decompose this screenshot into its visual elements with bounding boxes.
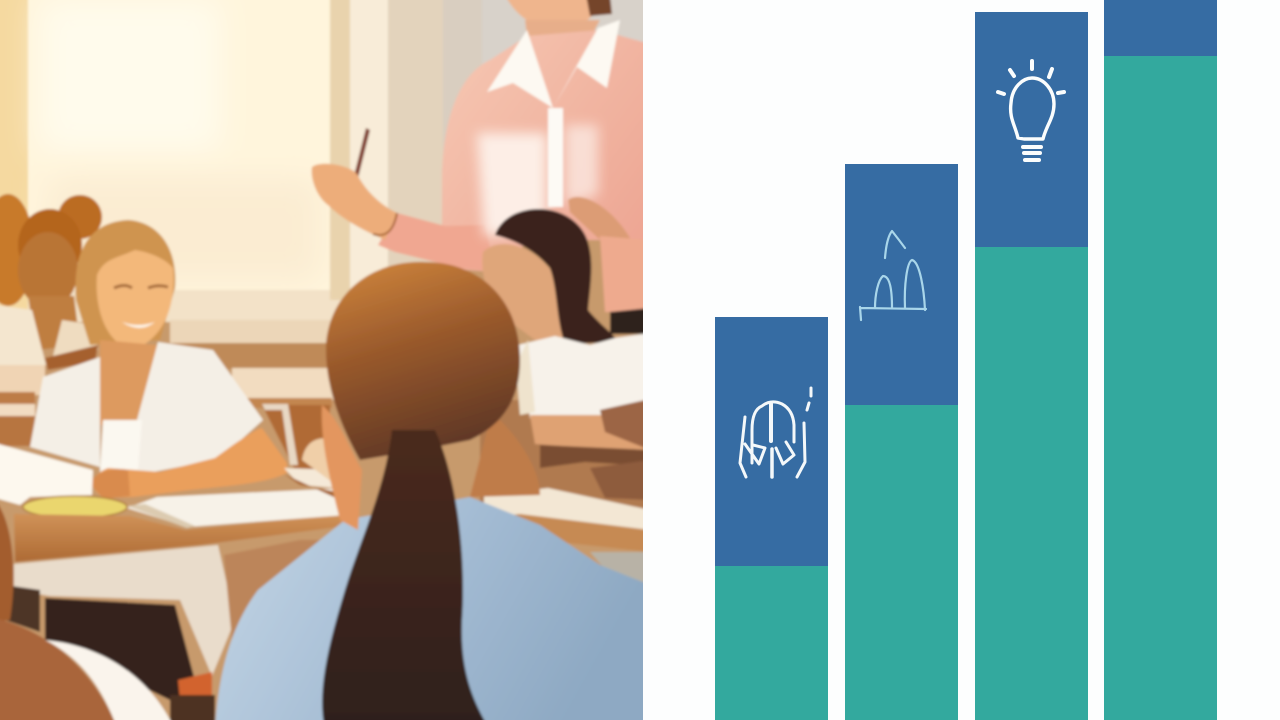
- tan filler behind the seated student: [480, 400, 650, 510]
- shirt: [30, 342, 263, 472]
- hand with pen: [354, 128, 370, 178]
- skirt and chair below desk: [5, 540, 330, 720]
- blouse: [442, 30, 643, 272]
- smiling student: [30, 220, 287, 499]
- seated student right: [482, 209, 650, 450]
- front left foreground shoulder: [0, 500, 175, 720]
- back student left: [0, 194, 102, 370]
- bar chart: rising blue and teal columns: [715, 0, 1217, 720]
- ponytail: [322, 430, 490, 720]
- bar 1: [715, 317, 828, 720]
- front student from behind: [215, 262, 650, 720]
- icon: sketched chart arches: [860, 231, 926, 320]
- collar and placket: [487, 30, 553, 108]
- window wall background: [0, 0, 653, 720]
- chin and neck: [506, 0, 592, 22]
- shirt: [215, 497, 650, 720]
- teacher: [312, 0, 650, 334]
- back desks left: [0, 392, 332, 470]
- folds: [477, 133, 547, 236]
- arm: [93, 428, 287, 498]
- bar 4: [1104, 0, 1217, 720]
- icon: light bulb with rays: [998, 61, 1064, 160]
- photo: classroom scene: [0, 0, 653, 720]
- right hand: [568, 197, 630, 246]
- bar 2: [845, 164, 958, 720]
- middle desks right: [284, 438, 650, 585]
- neck: [100, 340, 157, 425]
- bar 3: [975, 12, 1088, 720]
- open book and notes on front desk: [0, 443, 127, 518]
- icon: hands holding building: [740, 388, 811, 477]
- hair: [75, 220, 175, 345]
- head hair: [326, 262, 520, 460]
- face: [97, 250, 173, 350]
- ear and neck: [322, 405, 362, 530]
- front desk: [14, 488, 347, 562]
